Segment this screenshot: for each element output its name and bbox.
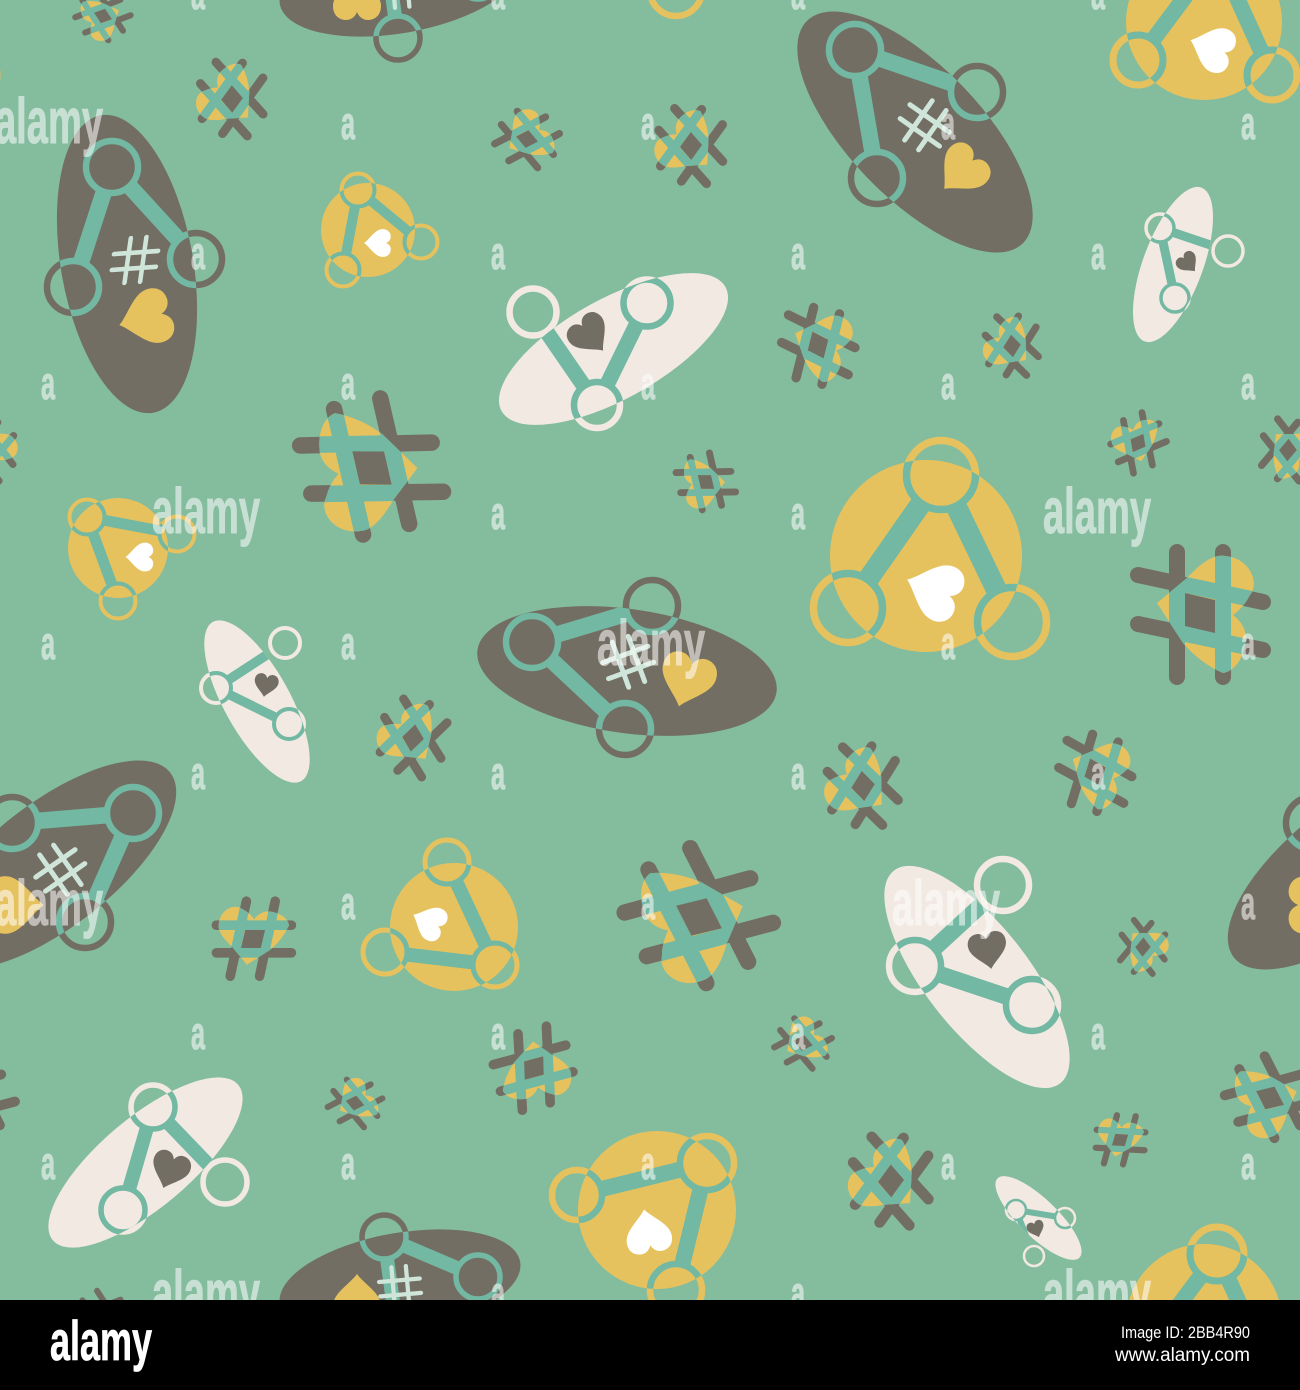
network motif: dark oval right edge wrap bbox=[1196, 724, 1300, 1006]
network motif: dark oval bottom bbox=[271, 1213, 529, 1360]
network motif: dark oval centre bbox=[469, 580, 785, 755]
network motif: large yellow disc right bbox=[814, 440, 1046, 656]
watermark: small letter grid: a bbox=[1091, 1007, 1105, 1059]
watermark: small letter grid: a bbox=[641, 877, 655, 929]
watermark: small letter grid: a bbox=[341, 617, 355, 669]
network motif: yellow disc bottom centre bbox=[552, 1131, 736, 1316]
watermark: small letter grid: a bbox=[1241, 357, 1255, 409]
network motif: dark oval bottom left bbox=[0, 724, 208, 1006]
footer band: www.alamy.com bbox=[1114, 1345, 1250, 1366]
watermark: small letter grid: a bbox=[191, 227, 205, 279]
network motif: yellow disc left upper bbox=[321, 174, 438, 286]
watermark: small letter grid: a bbox=[941, 357, 955, 409]
network motif: yellow disc bottom wrap bbox=[1113, 1227, 1297, 1390]
watermark: small letter grid: a bbox=[341, 877, 355, 929]
watermark: alamy wordmarks: alamy bbox=[1043, 1257, 1151, 1329]
watermark: small letter grid: a bbox=[941, 97, 955, 149]
watermark: small letter grid: a bbox=[41, 617, 55, 669]
watermark: small letter grid: a bbox=[791, 1007, 805, 1059]
watermark: small letter grid: a bbox=[341, 97, 355, 149]
network motif: dark oval top right bbox=[797, 12, 1033, 252]
watermark: small letter grid: a bbox=[641, 97, 655, 149]
watermark: small letter grid: a bbox=[791, 1267, 805, 1319]
watermark: small letter grid: a bbox=[191, 747, 205, 799]
watermark: small letter grid: a bbox=[491, 1007, 505, 1059]
watermark: small letter grid: a bbox=[491, 227, 505, 279]
watermark: small letter grid: a bbox=[1241, 617, 1255, 669]
network motif: small white oval top right bbox=[1133, 186, 1245, 342]
watermark: alamy wordmarks: alamy bbox=[0, 867, 103, 939]
watermark: alamy wordmarks: alamy bbox=[597, 607, 705, 679]
watermark: alamy wordmarks: alamy bbox=[0, 85, 103, 157]
watermark: alamy wordmarks: alamy bbox=[152, 1257, 260, 1329]
watermark: small letter grid: a bbox=[1091, 227, 1105, 279]
watermark: small letter grid: a bbox=[41, 1137, 55, 1189]
footer band bbox=[0, 1300, 1300, 1390]
footer band: alamy bbox=[50, 1309, 152, 1372]
watermark: small letter grid: a bbox=[41, 357, 55, 409]
watermark: small letter grid: a bbox=[1241, 1137, 1255, 1189]
watermark: small letter grid: a bbox=[341, 1137, 355, 1189]
network motif: tiny white oval bottom right bbox=[995, 1176, 1082, 1268]
network motif: dark oval left bbox=[36, 104, 222, 424]
network motif: yellow ring top edge wrap bbox=[552, 0, 736, 16]
watermark: small letter grid: a bbox=[641, 357, 655, 409]
watermark: small letter grid: a bbox=[1241, 97, 1255, 149]
watermark: alamy wordmarks: alamy bbox=[1043, 475, 1151, 547]
watermark: small letter grid: a bbox=[491, 487, 505, 539]
watermark: alamy wordmarks: alamy bbox=[892, 867, 1000, 939]
network motif: large white oval lower right bbox=[884, 856, 1070, 1088]
network motif: white oval centre bbox=[498, 273, 728, 432]
watermark: small letter grid: a bbox=[641, 1137, 655, 1189]
watermark: small letter grid: a bbox=[1241, 877, 1255, 929]
watermark: alamy wordmarks bbox=[0, 85, 1151, 1329]
watermark: small letter grid: a bbox=[941, 1137, 955, 1189]
network motif: yellow disc lower centre left bbox=[363, 840, 518, 991]
footer band: Image ID: 2BB4R90 bbox=[1121, 1323, 1250, 1342]
watermark: small letter grid: a bbox=[491, 1267, 505, 1319]
watermark: alamy wordmarks: alamy bbox=[152, 475, 260, 547]
watermark: small letter grid: a bbox=[791, 227, 805, 279]
network motif: small white oval left bbox=[199, 620, 310, 783]
watermark: small letter grid: a bbox=[791, 487, 805, 539]
network motif: yellow disc top right bbox=[1113, 0, 1297, 100]
network motif: dark oval top edge wrap bbox=[271, 0, 529, 60]
watermark: small letter grid: a bbox=[491, 747, 505, 799]
watermark: small letter grid: a bbox=[1091, 747, 1105, 799]
watermark: small letter grid: a bbox=[191, 1007, 205, 1059]
watermark: small letter grid: a bbox=[341, 357, 355, 409]
watermark: small letter grid: a bbox=[941, 617, 955, 669]
network motif: white oval bottom left bbox=[48, 1077, 250, 1248]
watermark: small letter grid: a bbox=[791, 747, 805, 799]
network motif: yellow disc left middle bbox=[68, 498, 194, 618]
